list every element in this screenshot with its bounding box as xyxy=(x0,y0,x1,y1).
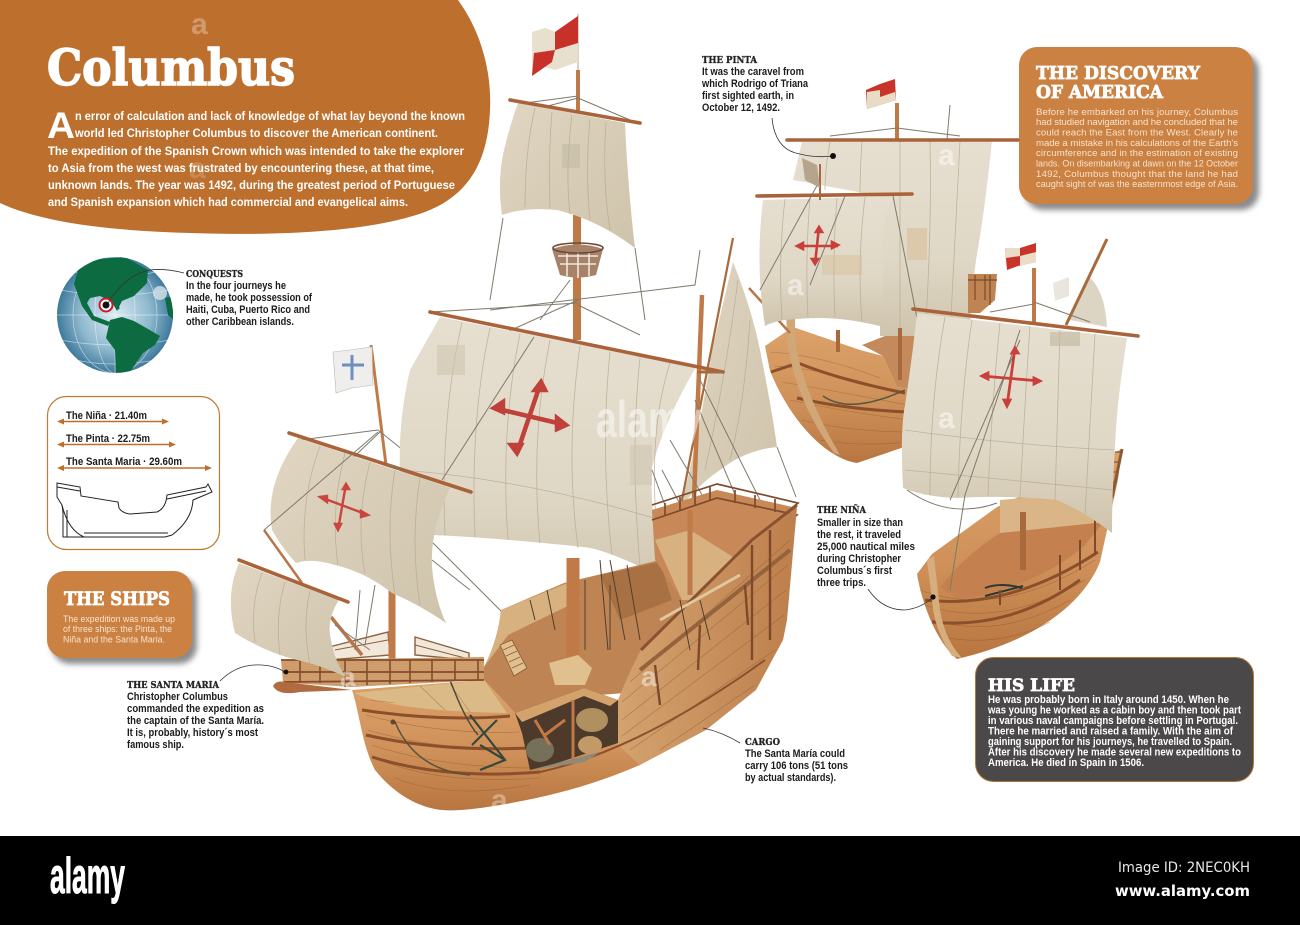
panel: the discovery of america: lands. On disembarking at dawn on the 12 October xyxy=(1036,158,1239,170)
text: cargo: CARGO xyxy=(745,737,780,748)
panel: his life: He was probably born in Italy around 1450. When he xyxy=(988,694,1229,706)
panel: his life: gaining support for his journeys, he travelled to Spain. xyxy=(988,736,1232,748)
text: the Santa Maria: It is, probably, history´s most xyxy=(127,727,258,739)
panel: the discovery of america xyxy=(1019,47,1259,210)
red cross xyxy=(320,484,368,530)
panel: his life: HIS LIFE xyxy=(988,676,1075,696)
ship: the Pinta xyxy=(749,79,1018,463)
intro text: unknown lands. The year was 1492, during the greatest period of Portuguese xyxy=(48,178,455,192)
intro text: world led Christopher Columbus to discover the American continent. xyxy=(74,126,438,140)
text: the Niña: Columbus´s first xyxy=(817,565,892,577)
text: the Pinta: THE PINTA xyxy=(702,55,758,66)
logo: alamy: alamy xyxy=(50,848,125,904)
panel: the ships xyxy=(47,571,197,664)
top sail xyxy=(500,100,640,248)
panel: title blob: a xyxy=(189,152,206,185)
main sail xyxy=(400,312,740,620)
text: the Santa Maria: the captain of the Santa María. xyxy=(127,715,264,727)
locator marker xyxy=(100,298,112,312)
image id: Image ID: 2NEC0KH xyxy=(1118,860,1250,876)
text: the Pinta: first sighted earth, in xyxy=(702,90,794,102)
stern castle xyxy=(968,274,997,313)
panel: his life: America. He died in Spain in 1506. xyxy=(988,757,1144,769)
intro text: and Spanish expansion which had commercial and evangelical aims. xyxy=(48,195,408,209)
fore sail xyxy=(264,432,471,655)
leader: Niña xyxy=(868,589,936,610)
text: conquests: In the four journeys he xyxy=(186,280,286,292)
bow rail and scroll: a xyxy=(340,661,356,692)
text: cargo xyxy=(745,737,848,784)
text: the Pinta: which Rodrigo of Triana xyxy=(701,78,809,90)
ship: the Pinta: a xyxy=(938,139,955,172)
fore sail xyxy=(757,158,917,328)
panel: the discovery of america: could reach the East from the West. Clearly he xyxy=(1036,128,1238,138)
bow rail and scroll: a xyxy=(641,661,657,692)
text: the Niña: the rest, it traveled xyxy=(817,529,901,541)
leader: Santa Maria xyxy=(220,665,288,681)
fore sail: a xyxy=(787,269,804,302)
panel: the ships: The expedition was made up xyxy=(63,614,175,625)
text: the Niña: during Christopher xyxy=(817,553,902,565)
length: Pinta xyxy=(57,433,176,448)
text: conquests: CONQUESTS xyxy=(186,269,243,280)
panel: the discovery of america: caught sight of was the easternmost edge of Asia. xyxy=(1036,179,1238,190)
footer bar xyxy=(0,836,1300,925)
panel: the discovery of america: OF AMERICA xyxy=(1036,82,1164,103)
sail: a xyxy=(938,402,955,435)
near side hull xyxy=(600,505,797,775)
title: Columbus xyxy=(47,38,295,97)
panel: the discovery of america: made a mistake in his calculations of the Earth's xyxy=(1036,138,1238,149)
ship outline xyxy=(57,483,212,537)
stern castle xyxy=(652,490,797,600)
panel: the discovery of america: THE DISCOVERY xyxy=(1036,63,1201,84)
crow's nest xyxy=(552,243,603,278)
icon: globe xyxy=(57,257,174,373)
text: the Pinta xyxy=(701,55,809,114)
hull xyxy=(749,288,925,463)
ship: the Santa Maria xyxy=(231,14,798,817)
anchor xyxy=(470,715,505,770)
panel: his life: After his discovery he made several new expeditions to xyxy=(988,746,1241,758)
text: the Niña xyxy=(817,504,915,589)
website: www.alamy.com xyxy=(1115,882,1250,900)
shrouds xyxy=(530,560,710,650)
main hull xyxy=(352,660,765,810)
text: the Pinta: October 12, 1492. xyxy=(702,102,780,114)
red cross xyxy=(982,348,1040,406)
text: conquests: other Caribbean islands. xyxy=(186,316,294,328)
text: the Niña: THE NIÑA xyxy=(817,504,867,516)
intro text: A xyxy=(47,105,75,146)
hull xyxy=(917,449,1123,659)
text: cargo: carry 106 tons (51 tons xyxy=(745,760,848,772)
panel: title blob xyxy=(0,0,490,234)
panel: the ships: THE SHIPS xyxy=(64,588,170,610)
red cross xyxy=(797,227,838,264)
length: Pinta: The Pinta · 22.75m xyxy=(66,433,150,445)
main sail: alamy xyxy=(596,391,702,449)
panel: his life xyxy=(976,658,1254,782)
length: Niña: The Niña · 21.40m xyxy=(66,410,147,422)
text: conquests xyxy=(186,269,312,328)
cargo hold cutaway: a xyxy=(491,784,508,817)
panel: his life: was young he worked as a cabin boy and then took part xyxy=(987,704,1241,716)
red cross xyxy=(494,382,566,453)
length: Santa Maria: The Santa Maria · 29.60m xyxy=(66,456,182,468)
panel: the discovery of america: 1492, Columbus thought that the land he had xyxy=(1036,169,1238,180)
text: the Niña: 25,000 nautical miles xyxy=(817,541,915,553)
text: the Santa Maria: THE SANTA MARIA xyxy=(127,680,220,691)
main mast and flag xyxy=(830,79,960,140)
text: the Santa Maria: Christopher Columbus xyxy=(127,691,228,703)
text: the Santa Maria xyxy=(127,680,264,751)
sail xyxy=(902,309,1138,590)
panel: ship lengths xyxy=(48,396,220,550)
panel: the discovery of america: circumference and in the estimation of existing xyxy=(1036,148,1238,159)
text: cargo: The Santa María could xyxy=(745,748,845,760)
intro text: The expedition of the Spanish Crown which was intended to take the explorer xyxy=(48,144,464,158)
length: Santa Maria xyxy=(57,456,212,471)
text: the Niña: three trips. xyxy=(817,577,866,589)
leader: Pinta xyxy=(772,118,836,159)
text: the Pinta: It was the caravel from xyxy=(702,66,804,78)
text: conquests: made, he took possession of xyxy=(186,292,312,304)
deck and interior xyxy=(484,484,798,713)
cargo hold cutaway xyxy=(491,688,618,817)
leader: conquests xyxy=(108,269,184,303)
panel: the discovery of america: Before he embarked on his journey, Columbus xyxy=(1036,107,1238,118)
text: the Santa Maria: commanded the expedition as xyxy=(127,703,264,715)
panel: his life: in various naval campaigns before settling in Portugal. xyxy=(988,715,1238,727)
panel: his life: There he married and raised a family. With the aim of xyxy=(988,726,1233,738)
text: the Santa Maria: famous ship. xyxy=(127,739,184,751)
ship: the Niña xyxy=(902,239,1138,659)
leader: cargo xyxy=(703,728,740,743)
panel: the discovery of america: had studied navigation and he concluded that he xyxy=(1036,117,1238,128)
panel: the ships: of three ships: the Pinta, the xyxy=(63,624,172,635)
panel: title blob: a xyxy=(191,8,208,41)
lateen mast, sail and flags xyxy=(990,239,1107,327)
mizzen lateen sail and spar xyxy=(680,238,796,600)
length: Niña xyxy=(57,410,169,424)
upper mast, flag and crow's nest xyxy=(430,14,700,340)
spritsail xyxy=(231,560,348,677)
text: cargo: by actual standards). xyxy=(745,772,836,784)
intro text: to Asia from the west was frustrated by encountering these, at that time, xyxy=(48,161,434,175)
lower main mast and step xyxy=(549,558,592,760)
ladder xyxy=(500,640,527,676)
far lines and fore mast xyxy=(300,345,440,660)
text: conquests: Haiti, Cuba, Puerto Rico and xyxy=(186,304,310,316)
main sail xyxy=(787,140,1018,336)
text: the Niña: Smaller in size than xyxy=(817,517,903,529)
bow rails xyxy=(329,595,469,660)
bow rail and scroll xyxy=(273,657,657,693)
panel: the ships: Niña and the Santa Maria. xyxy=(63,634,165,646)
intro text: n error of calculation and lack of knowledge of what lay beyond the known xyxy=(75,109,465,123)
intro text xyxy=(47,105,465,209)
